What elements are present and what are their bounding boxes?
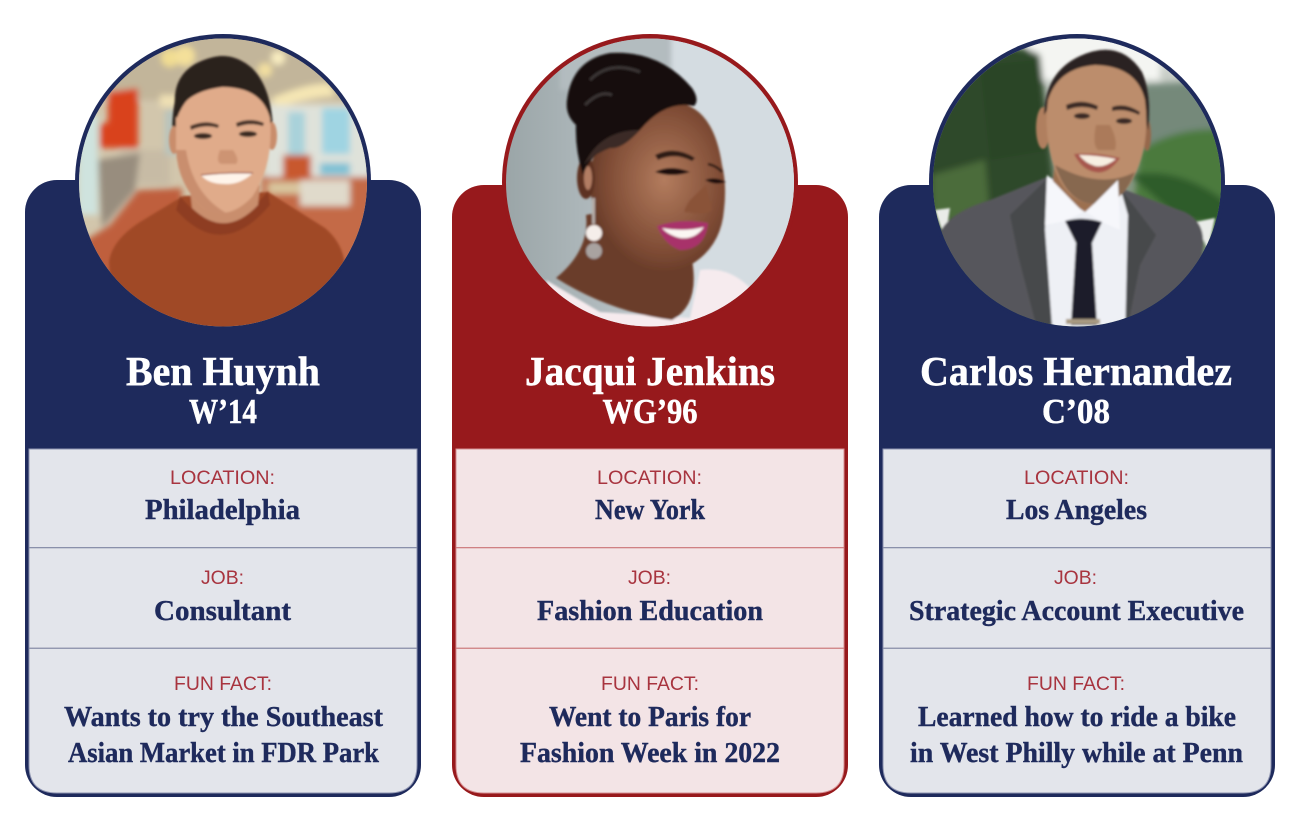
- location: Philadelphia: [145, 495, 300, 526]
- neck: [1052, 169, 1094, 213]
- fun fact: FUN FACT:: [174, 674, 272, 695]
- job: Strategic Account Executive: [909, 596, 1244, 627]
- portrait ring: [929, 34, 1225, 330]
- mouth: [201, 173, 253, 184]
- job: JOB:: [201, 568, 244, 589]
- face: [176, 87, 271, 213]
- card background: [879, 185, 1275, 797]
- details panel: [883, 449, 1271, 793]
- portrait ring: [502, 34, 798, 330]
- fun fact: [64, 674, 384, 769]
- brows: [190, 122, 219, 130]
- tie clip: [1066, 319, 1100, 324]
- neck: [190, 185, 260, 223]
- neck: [556, 200, 694, 320]
- portrait: Ben Huynh: [79, 38, 367, 326]
- portrait: Jacqui Jenkins: [506, 38, 794, 326]
- location: [145, 468, 300, 526]
- job: JOB:: [628, 568, 671, 589]
- card background: [25, 180, 421, 797]
- name: Carlos Hernandez: [920, 348, 1232, 394]
- fun fact: FUN FACT:: [1027, 674, 1125, 695]
- portrait: Carlos Hernandez: [933, 38, 1221, 326]
- collar: [1045, 175, 1083, 225]
- location: LOCATION:: [1024, 468, 1129, 489]
- location: [1006, 468, 1147, 526]
- fun fact: Wants to try the Southeast: [64, 702, 384, 733]
- white chair: [936, 206, 952, 230]
- name: Ben Huynh: [126, 348, 320, 394]
- mouth: [1074, 154, 1120, 172]
- shirt: [546, 268, 750, 326]
- job: [537, 568, 763, 627]
- face: [1047, 65, 1146, 204]
- ear: [577, 157, 595, 199]
- eyes: [194, 133, 212, 139]
- earring: [592, 198, 595, 224]
- face: [590, 103, 725, 274]
- class year: WG’96: [602, 392, 698, 431]
- nose: [218, 150, 237, 164]
- job: [154, 568, 292, 627]
- fun fact: Asian Market in FDR Park: [68, 738, 379, 769]
- ears: [169, 126, 179, 154]
- brows: [655, 151, 695, 161]
- job: JOB:: [1054, 568, 1097, 589]
- location: LOCATION:: [170, 468, 275, 489]
- card: Carlos Hernandez: [879, 30, 1275, 797]
- brows: [1066, 102, 1098, 110]
- class year: W’14: [189, 392, 257, 431]
- suit: [940, 176, 1204, 320]
- eyes: [1074, 113, 1090, 119]
- name: Jacqui Jenkins: [525, 348, 775, 394]
- tie: [1065, 219, 1102, 325]
- job: Fashion Education: [537, 596, 763, 627]
- eyes: [655, 168, 690, 175]
- details panel: [29, 449, 417, 793]
- fun fact: [520, 674, 780, 769]
- ear: [1036, 107, 1050, 149]
- job: [909, 568, 1244, 627]
- job: Consultant: [154, 596, 292, 627]
- hair front: [173, 57, 212, 118]
- hair back: [170, 55, 274, 128]
- portrait ring: [75, 34, 371, 330]
- card: Jacqui Jenkins: [452, 30, 848, 797]
- beard shadow: [1055, 165, 1135, 204]
- card background: [452, 185, 848, 797]
- nose: [1094, 125, 1116, 150]
- fun fact: Fashion Week in 2022: [520, 738, 780, 769]
- location: LOCATION:: [597, 468, 702, 489]
- sweater: [109, 192, 345, 340]
- class year: C’08: [1042, 392, 1110, 431]
- location: Los Angeles: [1006, 495, 1147, 526]
- shirt: [1045, 175, 1128, 340]
- fun fact: Went to Paris for: [549, 702, 751, 733]
- fun fact: FUN FACT:: [601, 674, 699, 695]
- hair: [567, 53, 697, 175]
- details panel: [456, 449, 844, 793]
- nose: [685, 190, 703, 212]
- lips: [657, 221, 708, 250]
- location: New York: [595, 495, 705, 526]
- fun fact: Learned how to ride a bike: [918, 702, 1236, 733]
- fun fact: in West Philly while at Penn: [910, 738, 1243, 769]
- card: Ben Huynh: [25, 30, 421, 797]
- hair: [1044, 50, 1149, 130]
- location: [595, 468, 705, 526]
- fun fact: [910, 674, 1243, 769]
